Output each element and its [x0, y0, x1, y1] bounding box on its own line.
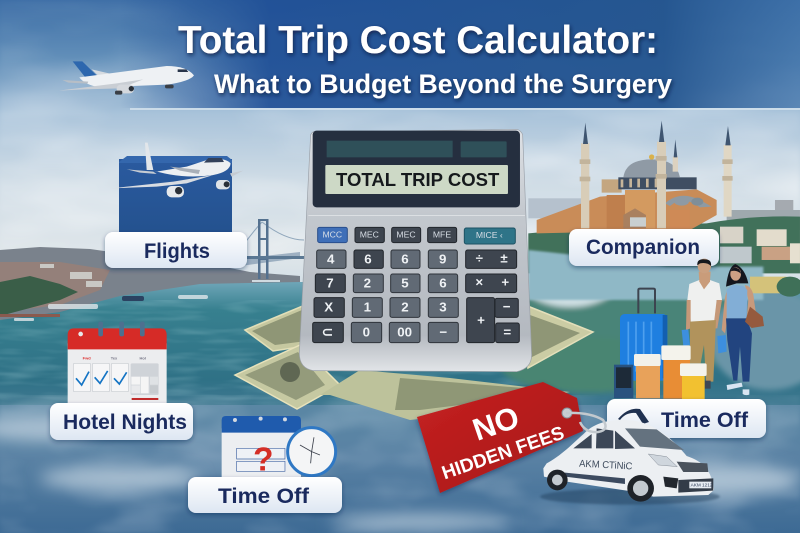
calculator [299, 129, 532, 372]
minarets [580, 121, 733, 228]
background: lower clouds [0, 395, 800, 533]
calculator function keys [318, 227, 515, 244]
icon: hotel calendar: Hol [139, 355, 146, 360]
calculator number keys: 5 [401, 276, 409, 291]
icon: airplane in title band [59, 61, 194, 95]
icon: hotel calendar [68, 322, 167, 403]
calculator operator keys: + [477, 313, 485, 328]
label: Time Off (left) [188, 477, 342, 513]
title: Total Trip Cost Calculator: [178, 19, 658, 62]
icon: calendar and clock [222, 416, 336, 479]
label: Companion [569, 229, 719, 266]
calculator number keys: 9 [439, 252, 446, 267]
calculator number keys: 4 [327, 252, 335, 267]
tag: NO HIDDEN FEES: HIDDEN FEES [439, 423, 567, 484]
calculator function keys: MEC [396, 229, 416, 239]
label: Hotel Nights: Hotel Nights [63, 411, 187, 434]
money stack under calculator [235, 305, 593, 420]
label: Hotel Nights [50, 403, 193, 440]
man [686, 259, 722, 389]
calculator number keys: 6 [364, 252, 372, 267]
calculator operator keys: ± [500, 250, 508, 265]
solar panel [327, 141, 507, 157]
calculator function keys: MCC [322, 229, 342, 239]
icon: airplane on card [112, 143, 243, 197]
calculator number keys: 1 [364, 300, 372, 315]
calculator number keys: 7 [326, 276, 334, 291]
label: Flights: Flights [144, 240, 210, 263]
calculator number keys: − [439, 325, 447, 340]
calculator function keys: MFE [433, 229, 451, 239]
label: Time Off (left): Time Off [218, 485, 310, 508]
mosque walls [537, 189, 717, 233]
calculator number keys: 6 [401, 252, 409, 267]
tag: NO HIDDEN FEES [417, 382, 606, 493]
background: sky [0, 0, 800, 300]
ferries [14, 295, 208, 321]
icon: hotel calendar: Fwd [83, 355, 91, 360]
tag: NO HIDDEN FEES: NO [468, 399, 524, 448]
calculator operator keys: = [503, 325, 511, 340]
calculator function keys: MEC [360, 229, 379, 239]
icon: calendar and clock: ? [253, 442, 273, 479]
icon: flights card [112, 143, 243, 232]
calculator number keys: 00 [397, 325, 412, 340]
label: Time Off (right) [607, 399, 766, 438]
background: Bosphorus sea [0, 282, 800, 422]
icon: hotel calendar: Tex [111, 355, 118, 360]
icon: medical device and pill bottles [614, 345, 707, 399]
calculator operator keys: ÷ [476, 250, 483, 265]
van: AKM Clinic [540, 420, 720, 505]
calculator display: TOTAL TRIP COST: TOTAL TRIP COST [336, 169, 499, 190]
calculator number keys: 2 [401, 300, 409, 315]
calculator number keys: 3 [439, 300, 447, 315]
label: Time Off (right): Time Off [661, 409, 749, 432]
van: AKM Clinic: AKM CTiNiC [579, 459, 633, 472]
subtitle: What to Budget Beyond the Surgery [214, 69, 672, 99]
calculator display: TOTAL TRIP COST [325, 165, 508, 194]
background: Istanbul shoreline left [0, 247, 300, 321]
calculator number keys: 6 [439, 276, 447, 291]
title band [120, 0, 800, 110]
calculator number keys: 0 [363, 325, 370, 340]
background: Bosphorus bridge [122, 219, 305, 301]
calculator operator keys: + [501, 275, 509, 290]
calculator number keys: 2 [364, 276, 371, 291]
calculator number keys [313, 250, 458, 343]
calculator operator keys [466, 250, 519, 343]
background: green terrain under clouds on right [470, 263, 800, 393]
calculator number keys: ⊂ [322, 325, 333, 340]
woman [722, 264, 764, 395]
label: Flights [105, 232, 247, 268]
background: Hagia Sophia and right skyline [528, 121, 800, 300]
calculator function keys: MICE ‹ [476, 230, 503, 240]
label: Companion: Companion [586, 236, 700, 259]
calculator number keys: X [324, 300, 333, 315]
calculator operator keys: − [503, 299, 511, 314]
title [178, 19, 672, 99]
people: travel companions [682, 259, 764, 395]
icon: blue suitcase [620, 289, 667, 381]
van: AKM Clinic: AKM 1212 [691, 483, 713, 488]
calculator operator keys: × [475, 275, 483, 290]
